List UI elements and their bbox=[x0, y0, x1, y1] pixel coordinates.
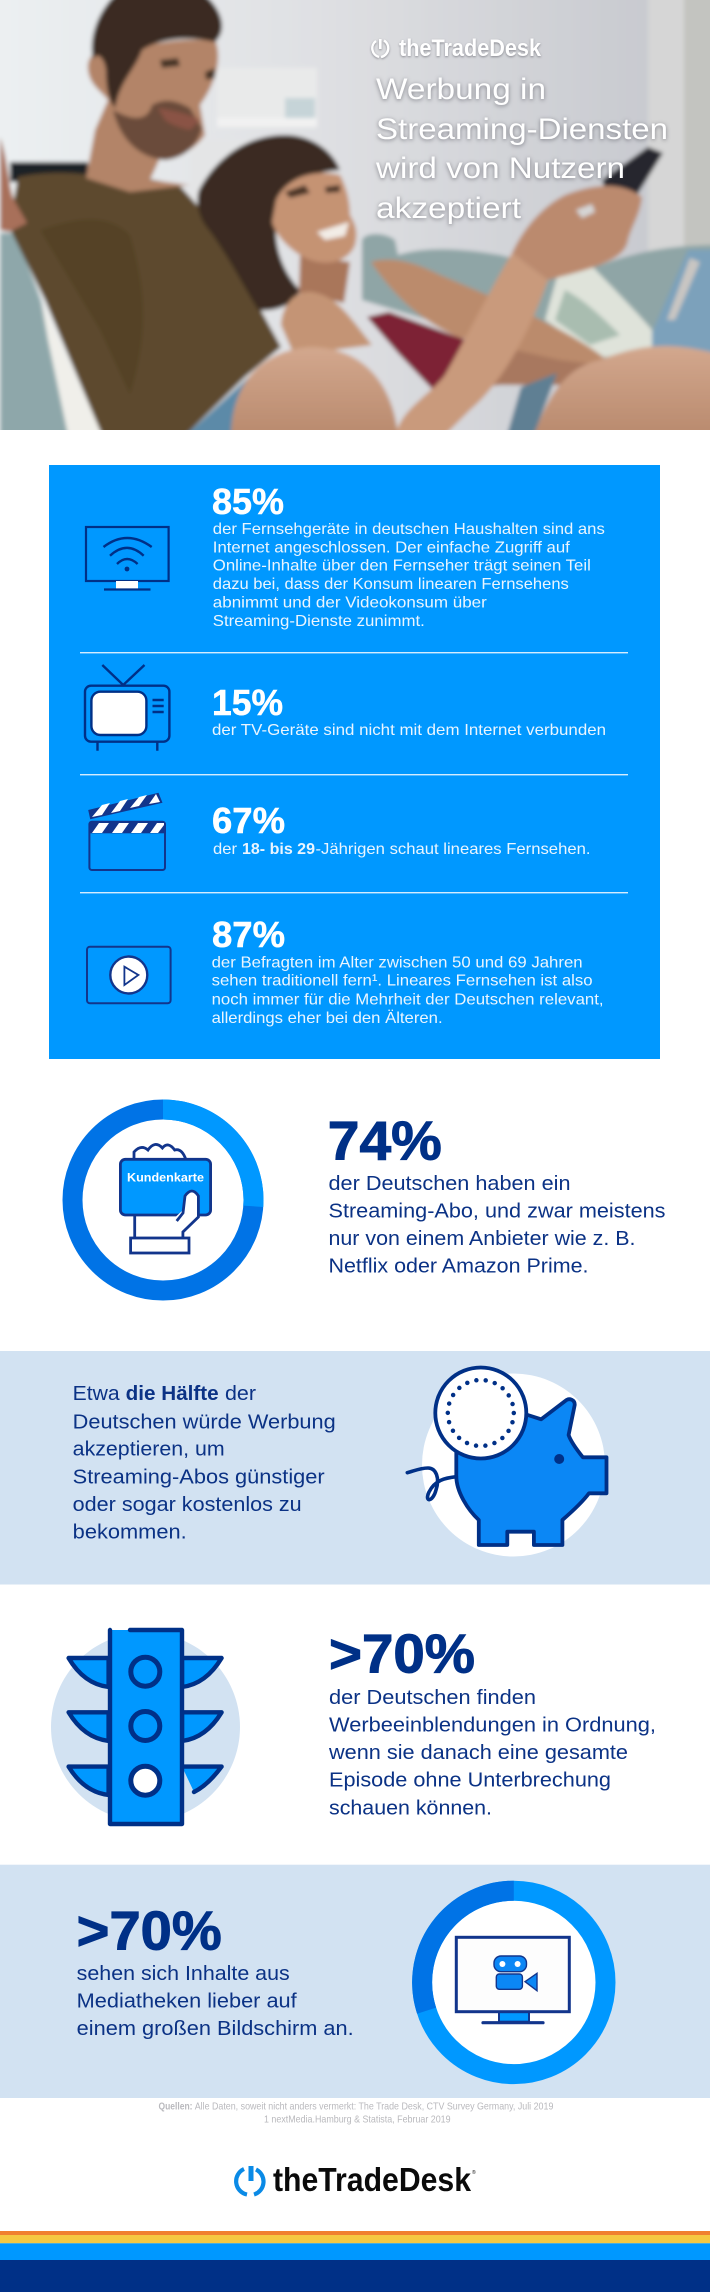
stat: 74% bbox=[328, 1109, 666, 1278]
stat: 67%: -Jährigen schaut lineares Fernsehen. bbox=[316, 841, 590, 858]
sources: Quellen: bbox=[158, 2100, 192, 2112]
icon: clapperboard bbox=[88, 793, 165, 870]
icon: play button screen bbox=[87, 947, 171, 1003]
stat: 87% bbox=[212, 914, 604, 1027]
stat: 85%: der Fernsehgeräte in deutschen Haushalten sind ans bbox=[213, 521, 605, 538]
stat: 67% bbox=[212, 800, 590, 858]
title: wird von Nutzern bbox=[375, 152, 625, 185]
stat: 67%: 18- bis 29 bbox=[242, 841, 315, 858]
stat: >70% big screen: einem großen Bildschirm an. bbox=[77, 2017, 354, 2040]
text: die Hälfte: oder sogar kostenlos zu bbox=[73, 1493, 302, 1516]
stat: 87%: sehen traditionell fern¹. Lineares Fernsehen ist also bbox=[212, 973, 593, 990]
stat: 87%: der Befragten im Alter zwischen 50 und 69 Jahren bbox=[212, 954, 583, 971]
icon: traffic light bbox=[51, 1630, 240, 1824]
stat: >70% ads acceptable: Episode ohne Unterbrechung bbox=[329, 1769, 611, 1792]
logo: theTradeDesk on photo: theTradeDesk bbox=[399, 35, 542, 62]
stat: >70% ads acceptable: Werbeeinblendungen in Ordnung, bbox=[329, 1714, 656, 1737]
stat: 74%: 74% bbox=[328, 1109, 442, 1171]
icon: retro TV bbox=[85, 665, 169, 751]
stat: 74%: Netflix oder Amazon Prime. bbox=[328, 1255, 588, 1278]
stat: 85%: dazu bei, dass der Konsum linearen Fernsehens bbox=[213, 576, 569, 593]
icon: ring with monitor and camera bbox=[422, 1891, 606, 2074]
text: die Hälfte: der bbox=[225, 1382, 256, 1405]
logo: theTradeDesk footer: theTradeDesk bbox=[273, 2161, 472, 2198]
icon: piggy bank with coin bbox=[407, 1368, 606, 1556]
stat: 87%: noch immer für die Mehrheit der Deutschen relevant, bbox=[212, 991, 604, 1008]
icon: ring with customer card bbox=[72, 1110, 254, 1290]
stat: 85%: Online-Inhalte über den Fernseher trägt seinen Teil bbox=[213, 558, 591, 575]
stat: 15%: der TV-Geräte sind nicht mit dem Internet verbunden bbox=[212, 722, 606, 739]
stat: >70% ads acceptable: wenn sie danach eine gesamte bbox=[328, 1741, 628, 1764]
panel: big screen preference bbox=[0, 1865, 710, 2098]
stat: >70% ads acceptable: der Deutschen finden bbox=[329, 1686, 536, 1709]
text: die Hälfte: bekommen. bbox=[73, 1520, 187, 1543]
stat: 85%: abnimmt und der Videokonsum über bbox=[213, 595, 488, 612]
logo: theTradeDesk footer: ® bbox=[472, 2169, 476, 2176]
icon: ring with customer card: Kundenkarte bbox=[127, 1171, 204, 1185]
title: Werbung in bbox=[376, 73, 546, 106]
icon: smart TV with wifi bbox=[86, 527, 169, 590]
stat: 85%: Internet angeschlossen. Der einfache Zugriff auf bbox=[213, 539, 570, 556]
stat: 74%: der Deutschen haben ein bbox=[328, 1172, 570, 1195]
text: die Hälfte: Deutschen würde Werbung bbox=[73, 1410, 336, 1433]
stat: 74%: nur von einem Anbieter wie z. B. bbox=[328, 1227, 636, 1250]
stat: >70% big screen bbox=[77, 1899, 354, 2040]
text: die Hälfte: Streaming-Abos günstiger bbox=[73, 1465, 325, 1488]
stat: >70% ads acceptable: >70% bbox=[329, 1623, 475, 1685]
title bbox=[375, 73, 668, 225]
title: akzeptiert bbox=[376, 192, 522, 225]
text: die Hälfte: akzeptieren, um bbox=[73, 1438, 225, 1461]
text: die Hälfte: Etwa bbox=[73, 1382, 120, 1405]
panel: blue statistics bbox=[49, 465, 660, 1059]
stat: 15% bbox=[212, 682, 606, 739]
footer colour stripes bbox=[0, 2231, 710, 2292]
sources: Alle Daten, soweit nicht anders vermerkt: The Trade Desk, CTV Survey Germany, Juli 2019 bbox=[195, 2100, 554, 2112]
stat: 85%: Streaming-Dienste zunimmt. bbox=[213, 613, 425, 630]
stat: 85% bbox=[212, 481, 605, 630]
stat: 15%: 15% bbox=[212, 682, 283, 723]
panel: half would accept ads bbox=[0, 1351, 710, 1584]
stat: 87%: allerdings eher bei den Älteren. bbox=[212, 1009, 443, 1027]
text: die Hälfte: die Hälfte bbox=[126, 1382, 219, 1405]
stat: >70% big screen: sehen sich Inhalte aus bbox=[77, 1962, 290, 1985]
stat: 87%: 87% bbox=[212, 914, 285, 955]
stat: >70% ads acceptable: schauen können. bbox=[329, 1796, 492, 1819]
text: die Hälfte bbox=[73, 1382, 336, 1543]
stat: >70% ads acceptable bbox=[328, 1623, 656, 1819]
photo: couple on sofa bbox=[0, 0, 710, 435]
stat: 74%: Streaming-Abo, und zwar meistens bbox=[328, 1200, 666, 1223]
stat: 67%: 67% bbox=[212, 800, 285, 841]
stat: >70% big screen: >70% bbox=[77, 1899, 222, 1961]
stat: 67%: der bbox=[213, 841, 238, 858]
sources bbox=[158, 2100, 554, 2126]
stat: >70% big screen: Mediatheken lieber auf bbox=[77, 1990, 297, 2013]
sources: 1 nextMedia.Hamburg & Statista, Februar 2019 bbox=[264, 2114, 451, 2126]
title: Streaming-Diensten bbox=[376, 113, 668, 146]
stat: 85%: 85% bbox=[212, 481, 284, 522]
